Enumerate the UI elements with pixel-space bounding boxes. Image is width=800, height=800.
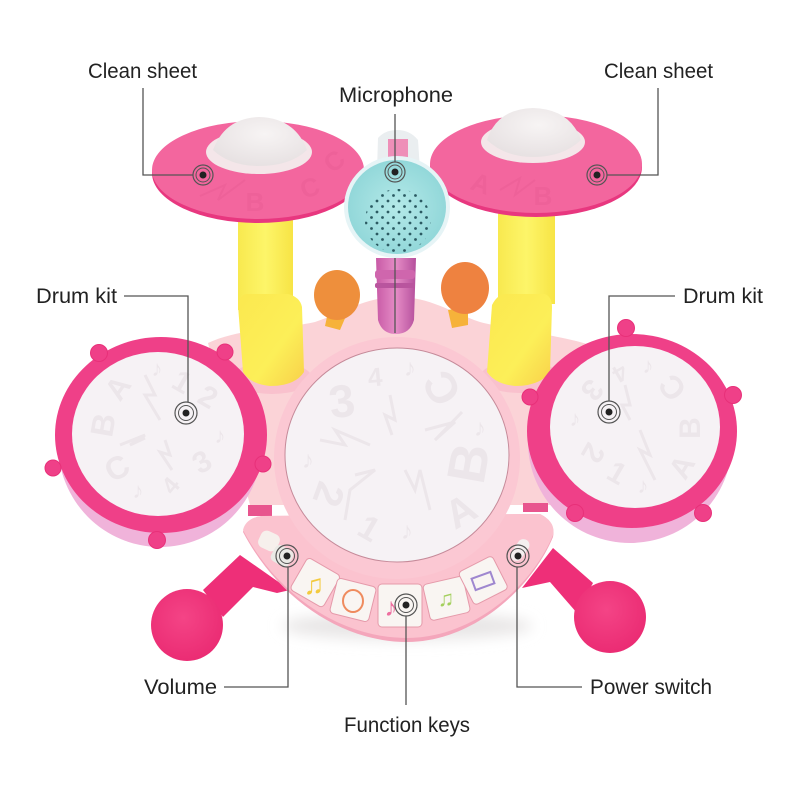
dark pink braces [248, 503, 548, 516]
centre drum: 4 [366, 361, 384, 393]
power switch [508, 537, 532, 563]
centre drum: B [436, 439, 502, 488]
centre drum [274, 337, 520, 579]
left drum: B [83, 410, 123, 440]
right drum: C [651, 367, 693, 408]
right drum: 2 [574, 437, 611, 468]
function key: piano: ♫ [438, 586, 454, 611]
callout: power switch: Power switch [590, 676, 712, 699]
orange mallet right [441, 262, 489, 328]
function key: notes: ♫ [304, 569, 324, 600]
legs: left stand [151, 555, 290, 661]
legs: right stand [522, 548, 646, 653]
left post [232, 220, 312, 394]
function key: drum kit [458, 555, 509, 606]
function key: piano [422, 576, 471, 621]
left drum: ♪ [152, 356, 162, 381]
left drum: C [98, 447, 136, 489]
right drum: ♪ [570, 406, 580, 431]
left cymbal: B [246, 187, 264, 217]
left drum: ♪ [214, 423, 226, 448]
centre drum: 2 [304, 476, 353, 512]
centre drum: ♪ [404, 355, 416, 382]
right post [480, 212, 560, 393]
function key: treble clef [378, 584, 422, 627]
function key: drum [329, 578, 377, 622]
callout: drum kit left: Drum kit [36, 285, 117, 308]
left drum: 1 [166, 364, 197, 401]
callout: drum kit right [598, 285, 763, 423]
right drum: 4 [607, 358, 632, 388]
left drum: ♪ [132, 478, 144, 503]
right cymbal: A [467, 166, 495, 201]
function key: treble clef: ♪ [384, 592, 398, 622]
right cymbal [430, 108, 642, 217]
function key: notes [290, 557, 341, 608]
right cymbal: B [534, 181, 552, 211]
right drum [522, 320, 742, 543]
left cymbal: C [296, 170, 324, 205]
callout: function keys [344, 594, 470, 737]
left drum: 4 [157, 472, 186, 500]
power button small [256, 529, 282, 553]
cymbal dome [206, 117, 312, 174]
callout: clean sheet right: Clean sheet [604, 60, 713, 83]
right drum: 1 [601, 455, 632, 492]
callout: volume: Volume [144, 676, 217, 699]
right drum: ♪ [638, 473, 648, 498]
shadow under toy [282, 612, 532, 640]
left cymbal [152, 117, 364, 223]
centre drum: A [437, 485, 485, 538]
left drum: A [99, 370, 138, 407]
centre drum: ♪ [302, 447, 314, 474]
right drum: 3 [574, 373, 610, 407]
callout: power switch [507, 545, 712, 699]
callout: microphone: Microphone [339, 84, 453, 107]
centre drum: ♪ [474, 415, 486, 442]
centre drum: ♪ [401, 518, 413, 545]
right drum: ♪ [642, 353, 654, 378]
control panel [243, 514, 553, 642]
callout: clean sheet left: Clean sheet [88, 60, 197, 83]
right drum: A [663, 450, 702, 485]
orange mallet left [314, 270, 360, 330]
volume button [269, 543, 295, 569]
callout: drum kit right: Drum kit [683, 285, 763, 308]
left cymbal: C [317, 143, 351, 179]
callout: function keys: Function keys [344, 714, 470, 737]
centre drum: 1 [351, 508, 387, 550]
left drum: 2 [192, 379, 223, 416]
callout: drum kit left [36, 285, 197, 424]
left drum [45, 337, 271, 548]
centre drum: 3 [326, 373, 358, 429]
cymbal dome [481, 108, 585, 163]
callout: microphone [339, 84, 453, 333]
callout: clean sheet right [587, 60, 713, 185]
callout: volume [144, 545, 298, 699]
centre drum: C [413, 362, 472, 414]
left drum: 3 [187, 444, 218, 481]
callout: clean sheet left [88, 60, 213, 185]
microphone [344, 130, 450, 334]
right drum: B [674, 417, 707, 439]
base body [208, 297, 590, 505]
